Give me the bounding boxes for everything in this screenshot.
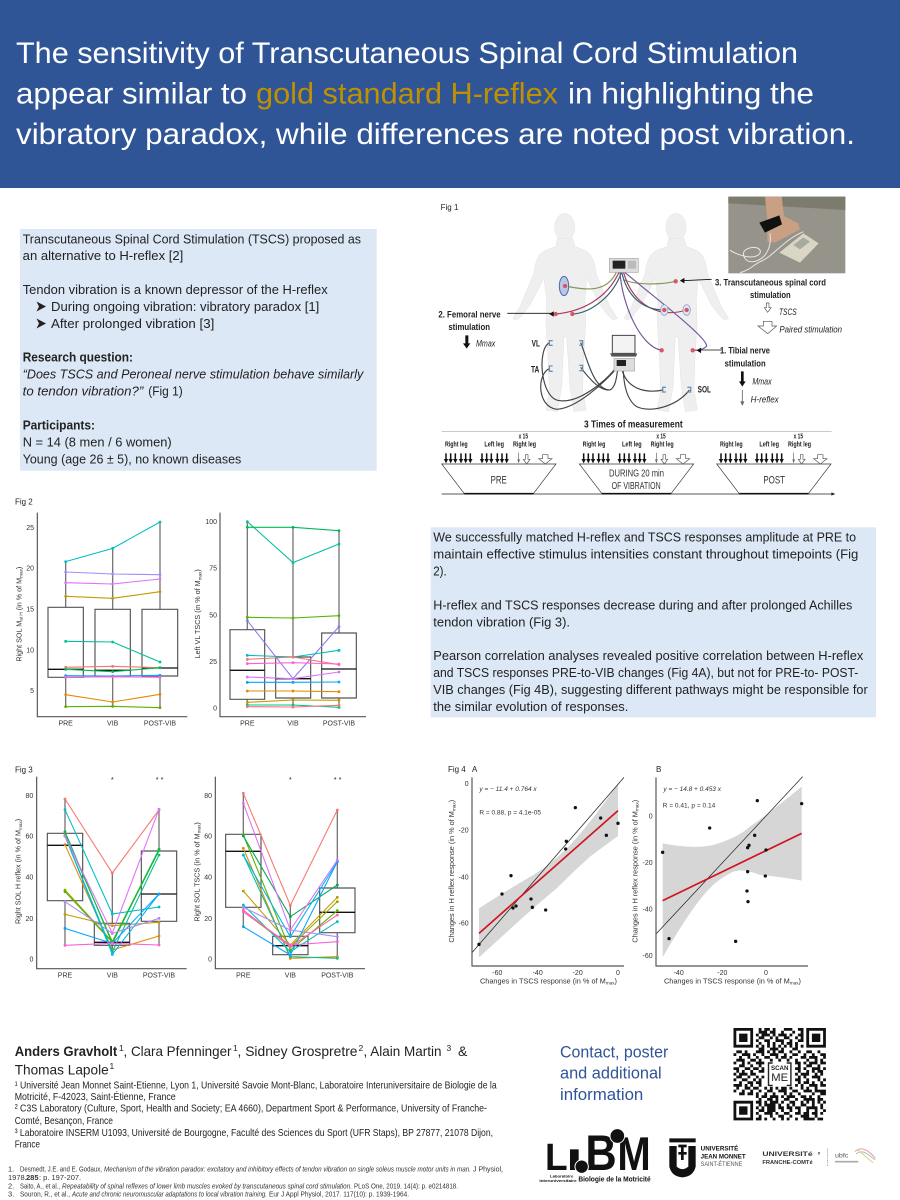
authors: 1	[110, 1061, 114, 1071]
QR code	[734, 1029, 826, 1119]
chart: left VL TSCS: 50	[209, 613, 217, 620]
muscle labels: SOL	[698, 385, 711, 395]
label: femoral nerve stimulation: Mmax	[476, 338, 496, 348]
chart: right SOL TSCS: 0	[208, 957, 212, 964]
panel: introduction and methods: Transcutaneous Spinal Cord Stimulation (TSCS) proposed as	[23, 231, 361, 246]
chart: right SOL TSCS: PRE	[236, 972, 251, 979]
timeline: 3 times of measurement	[442, 420, 835, 496]
label: transcutaneous spinal cord stimulation: 3. Transcutaneous spinal cord	[715, 277, 826, 287]
scatter B: -60	[643, 953, 653, 960]
panel: introduction and methods: Tendon vibration is a known depressor of the H-reflex	[23, 282, 328, 297]
electrodes	[549, 276, 693, 392]
scatter A: Changes in H reflex response (in % of M	[447, 811, 456, 943]
affiliations: Comté, Besançon, France	[15, 1115, 113, 1127]
scatter B: -20	[643, 860, 653, 867]
chart: right SOL M at H: VIB	[107, 720, 119, 727]
chart: right SOL M at H: 10	[26, 647, 34, 654]
logo: LiBM: Interuniversitaire	[539, 1179, 577, 1183]
chart: left VL TSCS: )	[193, 569, 202, 572]
chart: right SOL H reflex: max	[18, 821, 23, 830]
chart: right SOL M at H: POST-VIB	[144, 720, 176, 727]
figure 3 label: Fig 3	[15, 765, 33, 774]
panel: results summary: and TSCS responses PRE-to-VIB changes (Fig 4A), but not for PRE-to- POST-	[433, 665, 858, 680]
affiliations: France	[15, 1139, 40, 1151]
references	[8, 1165, 503, 1199]
label: transcutaneous spinal cord stimulation	[715, 277, 842, 335]
references: Acute and chronic neuromuscular adaptations to local vibration training.	[71, 1190, 267, 1199]
chart: right SOL TSCS: 40	[204, 875, 212, 882]
logo: LiBM: L	[545, 1136, 568, 1179]
chart: right SOL TSCS: Right SOL TSCS (in % of M	[192, 833, 201, 922]
authors: , Alain Martin	[364, 1043, 442, 1059]
chart: right SOL M at H: Right SOL M	[14, 621, 23, 662]
label: femoral nerve stimulation: stimulation	[448, 322, 490, 332]
panel: introduction and methods: (Fig 1)	[148, 384, 183, 399]
scatter B: Changes in TSCS response (in % of M	[664, 976, 790, 985]
chart: right SOL TSCS: *	[289, 775, 292, 784]
figure 3: boxplots of H reflex and TSCS	[14, 765, 365, 979]
chart: right SOL H reflex: 60	[26, 834, 33, 841]
scatter A: -60	[459, 921, 469, 928]
scatter B: 0	[649, 813, 653, 820]
scatter B: -20	[717, 970, 727, 977]
chart: right SOL M at H: PRE	[58, 720, 73, 727]
scatter A	[447, 765, 624, 986]
chart: left VL TSCS: VIB	[287, 720, 299, 727]
panel: introduction and methods: After prolonged vibration [3]	[51, 316, 214, 331]
chart: right SOL H reflex: VIB	[107, 972, 118, 979]
authors: &	[458, 1043, 468, 1059]
chart: right SOL M at H: 5	[30, 688, 34, 695]
scatter B: max	[635, 802, 640, 811]
chart: right SOL TSCS: VIB	[285, 972, 296, 979]
chart: right SOL H reflex: Right SOL H reflex (in % of M	[14, 830, 23, 924]
logo: Université Jean Monnet	[669, 1138, 746, 1177]
figure 1: experimental setup	[438, 197, 845, 496]
chart: right SOL H reflex: * *	[156, 775, 164, 784]
panel: results summary	[431, 527, 876, 717]
logo: Université Jean Monnet: SAINT-ÉTIENNE	[701, 1161, 742, 1168]
label: tibial nerve stimulation: 1. Tibial nerve	[720, 346, 770, 356]
panel: results summary: VIB changes (Fig 4B), suggesting different pathways might be responsible for	[433, 682, 868, 697]
references: Souron, R., et al.,	[20, 1190, 70, 1199]
pointer arrows	[507, 279, 722, 352]
references: Saito, A., et al.,	[20, 1181, 60, 1190]
references: PLoS One, 2019. 14(4): p. e0214818.	[354, 1181, 458, 1190]
chart: right SOL M at H	[14, 513, 187, 727]
chart: left VL TSCS: 75	[209, 566, 217, 573]
scatter A: )	[615, 976, 617, 985]
panel: introduction and methods	[20, 229, 377, 471]
scatter A: 0	[465, 781, 469, 788]
logo: LiBM: Laboratoire	[550, 1175, 574, 1179]
chart: right SOL M at H: max	[19, 568, 24, 578]
scatter B: R = 0.41, p = 0.14	[663, 803, 716, 810]
authors: 1	[233, 1043, 238, 1053]
chart: left VL TSCS: POST-VIB	[323, 720, 355, 727]
scatter A: y = − 11.4 + 0.764 x	[478, 786, 538, 793]
scatter A: -40	[459, 874, 469, 881]
chart: right SOL M at H: 20	[26, 566, 34, 573]
references: Desmedt, J.E. and E. Godaux,	[20, 1165, 102, 1174]
panel: results summary: maintain effective stimulus intensities constant throughout timepoints (Fig	[433, 547, 858, 562]
authors: Anders Gravholt	[15, 1043, 118, 1059]
scatter A: max	[451, 802, 456, 811]
chart: left VL TSCS: 25	[209, 659, 217, 666]
title	[16, 37, 855, 151]
label: tibial nerve stimulation: H-reflex	[751, 395, 779, 405]
panel: introduction and methods: During ongoing vibration: vibratory paradox [1]	[51, 299, 319, 314]
label: transcutaneous spinal cord stimulation: Paired stimulation	[779, 325, 842, 335]
scatter A: -40	[533, 970, 543, 977]
title: in highlighting the	[568, 78, 814, 110]
panel: results summary: 2).	[433, 564, 447, 579]
logo: Université Jean Monnet: UNIVERSITÉ	[701, 1144, 738, 1153]
chart: right SOL TSCS: 80	[204, 793, 212, 800]
authors: , Clara Pfenninger	[124, 1043, 232, 1059]
chart: right SOL H reflex: PRE	[58, 972, 73, 979]
title: appear similar to	[16, 78, 247, 110]
references: 1.	[8, 1165, 14, 1174]
photo of stimulation device	[728, 197, 845, 273]
chart: right SOL TSCS: )	[192, 822, 201, 825]
timeline: 3 times of measurement: OF VIBRATION	[612, 481, 661, 492]
references: 2.	[8, 1181, 14, 1190]
chart: left VL TSCS	[193, 513, 366, 727]
logo: LiBM: M	[617, 1128, 651, 1181]
scatter B: )	[630, 800, 639, 802]
logo: Université de Franche-Comté and UBFC: x	[818, 1151, 821, 1156]
scatter B: -40	[643, 906, 653, 913]
figure 4: correlation scatter plots	[447, 765, 808, 986]
panel: introduction and methods: to tendon vibration?”	[23, 384, 144, 399]
label: tibial nerve stimulation: stimulation	[725, 358, 766, 368]
logo: LiBM	[539, 1125, 651, 1184]
scan me badge	[768, 1063, 791, 1085]
references: Mechanism of the vibration paradox: excitatory and inhibitory effects of tendon vibration on single soleus muscle motor units in man.	[104, 1165, 471, 1174]
authors: Thomas Lapole	[15, 1061, 109, 1077]
authors: 2	[358, 1043, 364, 1053]
header banner	[0, 0, 900, 188]
chart: right SOL H reflex: *	[111, 775, 114, 784]
label: tibial nerve stimulation	[720, 346, 779, 406]
scatter A: -60	[492, 970, 502, 977]
chart: right SOL M at H: 15	[26, 606, 34, 613]
authors	[15, 1043, 468, 1077]
scatter A: 0	[616, 970, 620, 977]
figure 2: boxplots of M at H and VL TSCS	[14, 497, 366, 727]
laptop and amplifier	[610, 335, 637, 371]
affiliations: ² C3S Laboratory (Culture, Sport, Health and Society; EA 4660), Department Sport & Performance, University of Franche-	[15, 1103, 487, 1115]
panel: results summary: tendon vibration (Fig 3).	[433, 614, 570, 629]
authors: 1	[119, 1043, 124, 1053]
chart: right SOL H reflex: 20	[26, 916, 33, 923]
chart: left VL TSCS: 100	[205, 519, 217, 526]
contact text: Contact, poster	[560, 1043, 669, 1061]
panel: introduction and methods: “Does TSCS and Peroneal nerve stimulation behave similarly	[23, 367, 365, 382]
logo: Université de Franche-Comté and UBFC	[762, 1148, 875, 1167]
references: Repeatability of spinal reflexes of lower limb muscles evoked by transcutaneous spinal cord stimulation.	[62, 1181, 352, 1190]
panel: results summary: We successfully matched H-reflex and TSCS responses amplitude at PRE to	[433, 530, 856, 545]
muscle labels	[531, 339, 711, 395]
scatter B: B	[656, 765, 661, 774]
chart: right SOL H reflex: 80	[26, 793, 33, 800]
scatter B	[630, 765, 808, 986]
label: transcutaneous spinal cord stimulation: TSCS	[779, 307, 797, 317]
chart: left VL TSCS: 0	[213, 706, 217, 713]
human figures	[513, 213, 729, 412]
panel: introduction and methods: Participants:	[23, 417, 95, 432]
muscle labels: VL	[532, 339, 540, 349]
timeline: 3 times of measurement: 3 Times of measurement	[584, 420, 683, 431]
stimulator device	[609, 258, 638, 272]
scatter B: )	[799, 976, 801, 985]
chart: right SOL H reflex	[14, 775, 187, 979]
chart: left VL TSCS: Left VL TSCS (in % of M	[193, 580, 202, 658]
stimulation wires	[541, 272, 707, 409]
chart: right SOL H reflex: )	[14, 819, 23, 821]
scatter B: 0	[764, 970, 768, 977]
chart: left VL TSCS: max	[197, 571, 202, 580]
chart: left VL TSCS: PRE	[240, 720, 255, 727]
logo: Université de Franche-Comté and UBFC: UNIVERSITé	[762, 1151, 813, 1158]
contact text: information	[560, 1086, 643, 1104]
scatter B: y = − 14.8 + 0.453 x	[662, 786, 722, 793]
logo: LiBM: B	[585, 1125, 617, 1181]
references: Eur J Appl Physiol, 2017. 117(10): p. 1939-1964.	[269, 1190, 409, 1199]
figure 2 label: Fig 2	[15, 497, 33, 506]
chart: right SOL TSCS: 20	[204, 916, 212, 923]
affiliations: ³ Laboratoire INSERM U1093, Université de Bourgogne, Faculté des Sciences du Sport (UFR Staps), BP 27877, 21078 Dijon,	[15, 1127, 493, 1139]
figure 1 label: Fig 1	[441, 203, 459, 212]
label: transcutaneous spinal cord stimulation: stimulation	[750, 290, 791, 300]
logo: Université Jean Monnet: JEAN MONNET	[701, 1154, 746, 1161]
contact text	[560, 1043, 669, 1104]
affiliations: ¹ Université Jean Monnet Saint-Etienne, Lyon 1, Université Savoie Mont-Blanc, Laboratoire Interuniversitaire de Biologie de la	[15, 1079, 497, 1091]
muscle labels: TA	[531, 365, 540, 375]
scatter A: -20	[459, 828, 469, 835]
panel: results summary: Pearson correlation analyses revealed positive correlation between H-reflex	[433, 648, 864, 663]
scan me badge: SCAN	[771, 1065, 789, 1072]
authors: 3	[446, 1043, 452, 1053]
panel: introduction and methods: N = 14 (8 men / 6 women)	[23, 434, 172, 449]
label: tibial nerve stimulation: Mmax	[752, 377, 772, 387]
affiliations: Motricité, F-42023, Saint-Étienne, France	[15, 1090, 176, 1103]
scatter B: max	[790, 981, 799, 986]
timeline: 3 times of measurement: POST	[763, 474, 785, 486]
label: femoral nerve stimulation: 2. Femoral nerve	[438, 309, 501, 319]
panel: results summary: the similar evolution of responses.	[433, 699, 628, 714]
scatter A: max	[606, 981, 615, 986]
scatter B: Changes in H reflex response (in % of M	[630, 811, 639, 943]
authors: , Sidney Grospretre	[238, 1043, 358, 1059]
affiliations	[15, 1079, 497, 1151]
timeline: 3 times of measurement: PRE	[491, 474, 507, 486]
scatter A: A	[472, 765, 478, 774]
chart: right SOL M at H: at H	[19, 612, 24, 621]
scatter A: -20	[573, 970, 583, 977]
references: 3.	[8, 1190, 14, 1199]
references: J Physiol,	[473, 1165, 503, 1174]
label: femoral nerve stimulation	[438, 309, 501, 349]
title: vibratory paradox, while differences are noted post vibration.	[16, 118, 855, 151]
title: gold standard H-reflex	[256, 78, 558, 110]
scan me badge: ME	[771, 1072, 788, 1084]
references: 1978.	[8, 1173, 27, 1182]
panel: introduction and methods: Young (age 26 ± 5), no known diseases	[23, 451, 242, 466]
chart: right SOL M at H: )	[14, 567, 23, 569]
scatter A: Changes in TSCS response (in % of M	[480, 976, 606, 985]
chart: right SOL TSCS: max	[197, 824, 202, 833]
chart: right SOL H reflex: 0	[29, 957, 33, 964]
chart: right SOL H reflex: POST-VIB	[143, 972, 175, 979]
chart: right SOL TSCS: * *	[334, 775, 342, 784]
figure 4 label: Fig 4	[448, 765, 466, 774]
chart: right SOL TSCS	[192, 775, 365, 979]
chart: right SOL M at H: 25	[26, 525, 34, 532]
logo: Université de Franche-Comté and UBFC: FRANCHE-COMTé	[762, 1160, 813, 1166]
contact text: and additional	[560, 1065, 662, 1083]
logo: Université de Franche-Comté and UBFC: ubfc	[835, 1154, 848, 1160]
scatter B: -40	[674, 970, 684, 977]
panel: introduction and methods: Research question:	[23, 350, 133, 365]
chart: right SOL TSCS: POST-VIB	[321, 972, 354, 979]
scatter A: )	[447, 800, 456, 802]
references: 285	[26, 1173, 39, 1182]
logo: LiBM: Biologie de la Motricité	[578, 1175, 651, 1184]
chart: right SOL M at H: (in % of M	[14, 578, 23, 612]
title: The sensitivity of Transcutaneous Spinal Cord Stimulation	[16, 37, 798, 70]
chart: right SOL TSCS: 60	[204, 834, 212, 841]
scatter A: R = 0.88, p = 4.1e-05	[479, 810, 541, 817]
timeline: 3 times of measurement: DURING 20 min	[609, 469, 664, 480]
panel: introduction and methods: an alternative to H-reflex [2]	[23, 248, 183, 263]
panel: results summary: H-reflex and TSCS responses decrease during and after prolonged Achilles	[433, 597, 853, 612]
references: : p. 197-207.	[39, 1173, 81, 1182]
chart: right SOL H reflex: 40	[26, 875, 33, 882]
